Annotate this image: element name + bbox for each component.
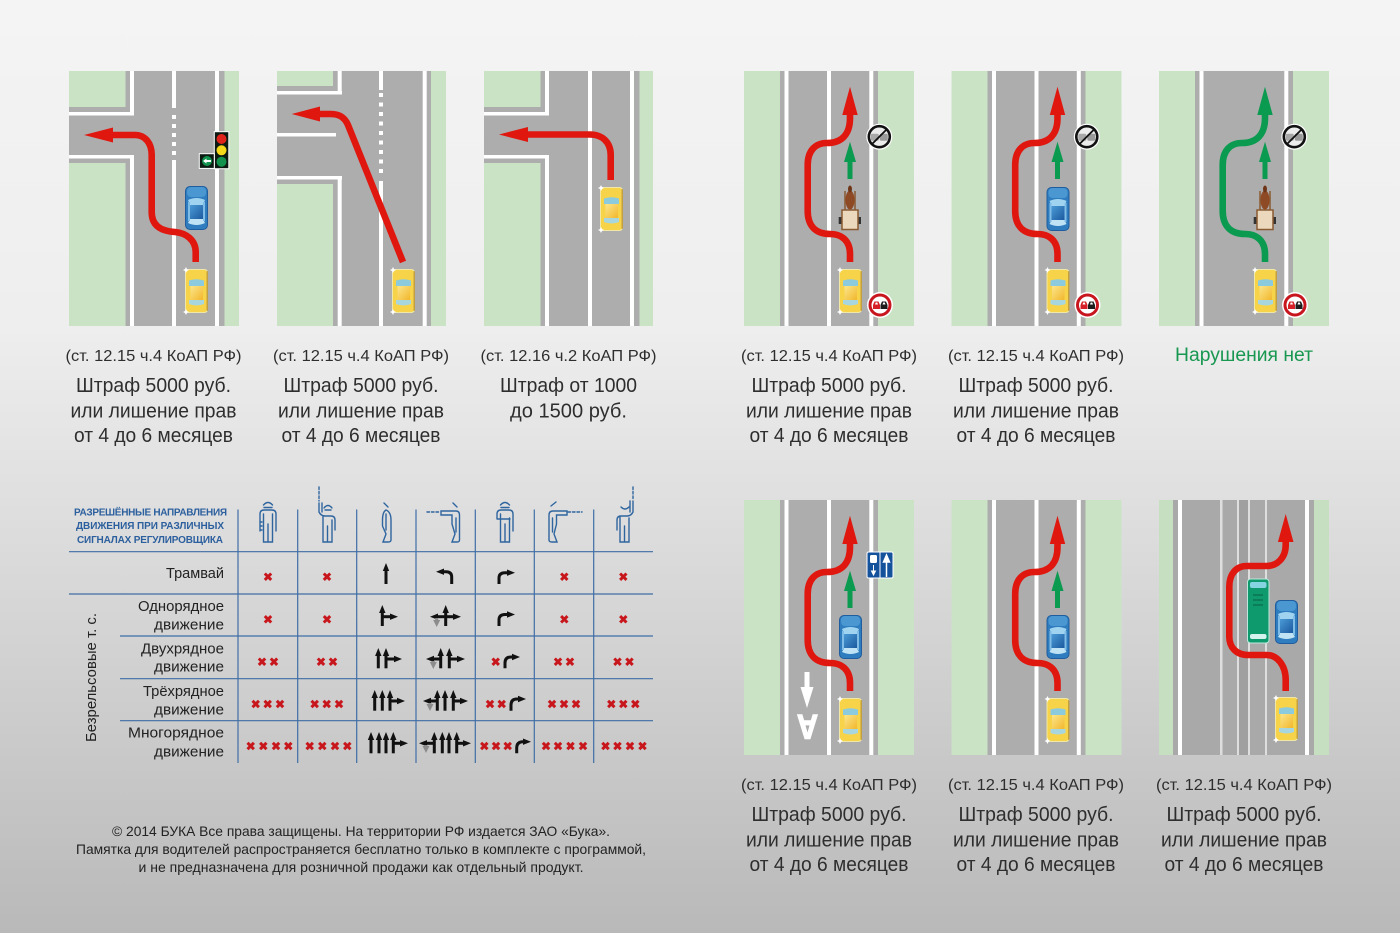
- table heading: ДВИЖЕНИЯ ПРИ РАЗЛИЧНЫХ: [76, 521, 224, 532]
- caption: panel 7: (ст. 12.15 ч.4 КоАП РФ): [741, 777, 917, 794]
- caption: panel 8: [948, 777, 1124, 876]
- table heading: [74, 506, 227, 546]
- caption: panel 4: Штраф 5000 руб.: [752, 375, 906, 397]
- caption: panel 2: [273, 348, 449, 447]
- row labels: движение: [154, 659, 224, 676]
- car: yellow: [1252, 267, 1277, 315]
- caption: panel 5: Штраф 5000 руб.: [958, 375, 1114, 397]
- row: three lane directions: [252, 697, 638, 711]
- caption: panel 4: или лишение прав: [746, 400, 912, 422]
- caption: panel 3: Штраф от 1000: [500, 375, 637, 397]
- car: blue: [1047, 188, 1069, 230]
- icon: controller, arm raised left: [319, 487, 335, 542]
- caption: panel 9: [1156, 777, 1332, 876]
- row labels: движение: [154, 616, 224, 634]
- panel: permitted overtaking of cart: [1159, 71, 1329, 326]
- road: [744, 500, 914, 755]
- caption: panel 3: до 1500 руб.: [510, 400, 627, 422]
- arrow: red route: [292, 106, 403, 262]
- road junction: [484, 71, 653, 326]
- road junction: [277, 71, 446, 326]
- panel: diagonal left turn: [277, 71, 446, 326]
- icon: controller, arm raised right: [617, 487, 633, 542]
- horse cart: [1254, 186, 1276, 230]
- row: multi lane directions: [248, 739, 646, 753]
- caption: panel 7: от 4 до 6 месяцев: [750, 854, 908, 876]
- caption: panel 1: или лишение прав: [70, 400, 236, 422]
- arrow: green straight: [1052, 142, 1064, 179]
- row labels: движение: [154, 701, 224, 718]
- sign: no overtaking: [1282, 292, 1308, 318]
- caption: panel 4: (ст. 12.15 ч.4 КоАП РФ): [741, 348, 917, 365]
- car: yellow: [1044, 267, 1070, 315]
- car: yellow: [598, 185, 623, 233]
- arrow: red route: [1229, 514, 1294, 691]
- caption: panel 4: от 4 до 6 месяцев: [750, 425, 908, 447]
- copyright note: © 2014 БУКА Все права защищены. На территории РФ издается ЗАО «Бука».: [112, 823, 610, 839]
- caption: panel 5: или лишение прав: [953, 400, 1119, 422]
- arrow: red route: [1015, 87, 1065, 262]
- copyright note: Памятка для водителей распространяется бесплатно только в комплекте с программой,: [76, 841, 646, 857]
- icon: controller, back: [497, 502, 513, 542]
- sign: end of no overtaking: [1074, 124, 1100, 150]
- caption: panel 5: от 4 до 6 месяцев: [956, 425, 1116, 447]
- caption: panel 2: (ст. 12.15 ч.4 КоАП РФ): [273, 348, 449, 365]
- road: [952, 500, 1122, 755]
- arrow: red route: [1015, 516, 1065, 691]
- row labels: [128, 565, 224, 760]
- sign: end of no overtaking: [866, 124, 892, 150]
- caption: panel 2: от 4 до 6 месяцев: [282, 425, 440, 447]
- caption: panel 2: Штраф 5000 руб.: [284, 375, 438, 397]
- panel: overtaking on bus lane road: [744, 500, 914, 755]
- panel: left turn across solid line: [484, 71, 653, 326]
- arrow: red route: [808, 87, 858, 262]
- road: [952, 71, 1122, 326]
- caption: panel 7: [741, 777, 917, 876]
- road marking: down arrow and letter: А: [797, 707, 818, 745]
- row: single lane directions: [265, 612, 626, 626]
- bus: green: [1248, 579, 1269, 643]
- caption: panel 7: Штраф 5000 руб.: [752, 804, 906, 826]
- copyright note: [76, 823, 646, 875]
- caption: panel 8: или лишение прав: [953, 830, 1119, 852]
- car: yellow: [390, 267, 415, 315]
- arrow: green route: [1223, 87, 1273, 262]
- row labels: Трёхрядное: [143, 683, 224, 700]
- caption: panel 8: от 4 до 6 месяцев: [956, 854, 1116, 876]
- caption: panel 1: (ст. 12.15 ч.4 КоАП РФ): [66, 348, 241, 365]
- row: tram directions: [265, 570, 626, 584]
- car: blue: [1047, 616, 1069, 658]
- panel: overtaking car across solid line: [952, 500, 1122, 755]
- arrow: red route: [499, 127, 611, 180]
- car: yellow: [183, 267, 208, 315]
- caption: panel 5: [948, 348, 1124, 447]
- car: yellow: [1273, 695, 1298, 743]
- road: [744, 71, 914, 326]
- table heading: СИГНАЛАХ РЕГУЛИРОВЩИКА: [77, 535, 223, 546]
- table heading: РАЗРЕШЁННЫЕ НАПРАВЛЕНИЯ: [74, 506, 227, 518]
- arrow: green straight: [844, 142, 856, 179]
- arrow: green straight: [844, 571, 856, 608]
- caption: panel 8: (ст. 12.15 ч.4 КоАП РФ): [948, 777, 1124, 794]
- car: blue: [1276, 600, 1298, 644]
- sign: bus lane: [867, 552, 893, 578]
- icon: controller, side arm forward: [427, 503, 460, 542]
- row labels: Трамвай: [166, 565, 224, 582]
- caption: panel 9: Штраф 5000 руб.: [1166, 804, 1322, 826]
- icon: controller, side arm right: [549, 502, 582, 542]
- car: yellow: [1044, 696, 1070, 744]
- panel: left turn at traffic light: [69, 71, 239, 326]
- row labels: Многорядное: [128, 725, 224, 742]
- panel: overtaking car in no-overtaking zone: [952, 71, 1122, 326]
- caption: panel 1: [66, 348, 241, 447]
- sign: no overtaking: [867, 292, 893, 318]
- caption: panel 3: [480, 348, 656, 422]
- row labels: Двухрядное: [141, 640, 224, 657]
- road marking: down arrow and letter: [797, 672, 818, 745]
- road junction: [69, 71, 239, 326]
- caption: no violation: Нарушения нет: [1175, 345, 1313, 366]
- copyright note: и не предназначена для розничной продажи как отдельный продукт.: [138, 859, 584, 875]
- sign: no overtaking: [1074, 292, 1100, 318]
- row labels: движение: [154, 743, 224, 760]
- icon: controller, side: [382, 503, 391, 542]
- car: blue: [186, 186, 208, 230]
- panel: overtaking across tram tracks: [1159, 500, 1329, 755]
- arrow: green straight: [1259, 142, 1271, 179]
- road: [1159, 71, 1329, 326]
- caption: panel 3: (ст. 12.16 ч.2 КоАП РФ): [480, 348, 656, 365]
- arrow: green straight: [1052, 571, 1064, 608]
- arrow: red route: [808, 516, 858, 691]
- caption: panel 9: или лишение прав: [1161, 830, 1327, 852]
- sign: end of no overtaking: [1281, 124, 1307, 150]
- caption: panel 5: (ст. 12.15 ч.4 КоАП РФ): [948, 348, 1124, 365]
- caption: panel 4: [741, 348, 917, 447]
- road with tram tracks: [1159, 500, 1329, 755]
- row: two lane directions: [259, 655, 633, 668]
- caption: panel 7: или лишение прав: [746, 830, 912, 852]
- icon: traffic light: [199, 132, 229, 169]
- table: traffic controller signals: [69, 487, 653, 763]
- vertical label: Безрельсовые т. с.: [83, 613, 100, 742]
- horse cart: [839, 186, 861, 230]
- caption: panel 1: Штраф 5000 руб.: [76, 375, 231, 397]
- row labels: Однорядное: [138, 598, 224, 615]
- panel: overtaking cart in no-overtaking zone: [744, 71, 914, 326]
- car: yellow: [837, 696, 862, 744]
- caption: panel 2: или лишение прав: [278, 400, 444, 422]
- car: blue: [840, 616, 862, 658]
- table grid: [69, 510, 653, 763]
- arrow: red route: [84, 128, 196, 262]
- car: yellow: [837, 267, 862, 315]
- caption: panel 9: (ст. 12.15 ч.4 КоАП РФ): [1156, 777, 1332, 794]
- caption: panel 8: Штраф 5000 руб.: [958, 804, 1114, 826]
- caption: panel 9: от 4 до 6 месяцев: [1164, 854, 1324, 876]
- caption: panel 1: от 4 до 6 месяцев: [74, 425, 233, 447]
- icon: controller, front: [260, 502, 276, 542]
